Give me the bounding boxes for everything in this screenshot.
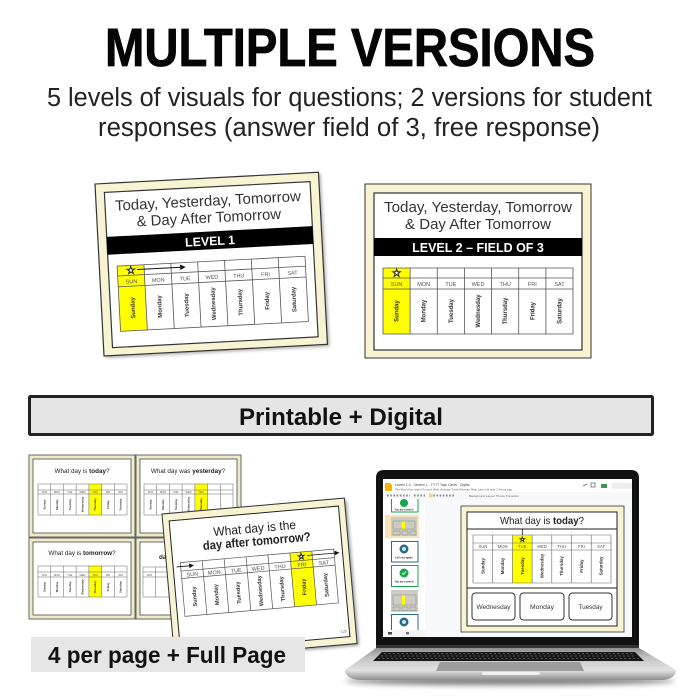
calendar: Monday <box>422 299 428 322</box>
calendar: THU <box>274 564 286 571</box>
calendar: FRI <box>528 282 537 288</box>
panel: full page card <box>162 498 359 661</box>
panel: level 1 card <box>95 172 330 358</box>
card: tomorrow: Sunday <box>42 582 46 592</box>
calendar: FRI <box>261 272 271 278</box>
calendar: Thursday <box>279 575 287 602</box>
calendar: Wednesday <box>540 553 544 578</box>
panel: four per page cards <box>29 455 241 619</box>
calendar: Saturday <box>291 286 299 312</box>
laptop base <box>345 648 676 680</box>
card: tomorrow: MON <box>54 573 60 577</box>
calendar: Wednesday <box>257 574 265 606</box>
calendar: Monday <box>157 294 164 318</box>
calendar: Wednesday <box>476 294 482 328</box>
card: today: Saturday <box>119 498 123 510</box>
title: MULTIPLE VERSIONS <box>105 18 595 78</box>
calendar <box>180 549 338 616</box>
calendar: Sunday <box>395 300 401 322</box>
calendar: Tuesday <box>184 292 191 317</box>
label: 4 per page + full page: 4 per page + Full Page <box>48 642 286 668</box>
calendar: Friday <box>579 559 584 573</box>
card heading <box>384 199 572 233</box>
calendar: SAT <box>554 282 565 288</box>
card: today: Friday <box>106 500 110 509</box>
answer choices <box>472 593 612 620</box>
calendar: Friday <box>530 301 536 320</box>
calendar: THU <box>233 273 245 280</box>
calendar: Tuesday <box>235 580 243 604</box>
banner: printable + digital: Printable + Digital <box>239 404 443 431</box>
calendar: TUE <box>518 544 527 549</box>
card: yesterday: Tuesday <box>174 498 178 510</box>
calendar: FRI <box>297 562 307 569</box>
menu: File Edit View Insert Format Slide Arrange Tools Website Help Last edit was 2 hours ago <box>395 488 512 492</box>
calendar <box>473 529 611 583</box>
slides window <box>383 479 632 637</box>
calendar: Tuesday <box>520 557 525 575</box>
document title: Levels 1-4 - Version 1 - TYTT Task Cards - Digital <box>395 483 470 487</box>
calendar: SUN <box>478 544 487 549</box>
calendar: Monday <box>500 557 505 574</box>
card: yesterday: What day was yesterday? <box>151 468 226 475</box>
subtitle: responses (answer field of 3, free response) <box>98 114 600 142</box>
sidebar thumbnails: Let's try again! <box>395 556 413 560</box>
card: today: THU <box>93 490 98 494</box>
card: today: SUN <box>42 490 47 494</box>
card: yesterday: Sunday <box>148 499 152 510</box>
answer choices: Wednesday <box>476 604 511 611</box>
panel: level 2 card <box>365 184 591 358</box>
answer choices: Tuesday <box>578 604 603 611</box>
card: tomorrow: Wednesday <box>80 579 84 595</box>
answer choices: Monday <box>530 604 555 611</box>
card: today <box>29 455 135 537</box>
calendar: SAT <box>287 270 298 277</box>
level label: LEVEL 1 <box>185 233 235 250</box>
card: today: Thursday <box>93 498 97 511</box>
card: yesterday: MON <box>160 490 166 494</box>
card: yesterday <box>136 455 241 537</box>
calendar: Saturday <box>599 556 604 575</box>
calendar: Friday <box>301 577 309 595</box>
calendar: Thursday <box>237 288 245 316</box>
card: tomorrow: What day is tomorrow? <box>48 550 116 557</box>
calendar: WED <box>472 282 484 288</box>
slide canvas <box>425 499 632 637</box>
calendar: Thursday <box>559 556 564 576</box>
arrow <box>137 265 185 272</box>
sidebar thumbnails: You are correct! <box>394 508 414 512</box>
card: today: SAT <box>118 490 124 494</box>
calendar: Saturday <box>558 298 564 324</box>
calendar: MON <box>417 282 430 288</box>
card: yesterday: Monday <box>161 499 165 510</box>
toolbar: Background Layout Theme Transition <box>469 494 519 498</box>
calendar: Thursday <box>503 297 509 325</box>
arrows <box>177 551 339 569</box>
card: tomorrow: THU <box>93 573 98 577</box>
laptop screen bezel <box>376 470 639 648</box>
app icon <box>385 483 392 491</box>
calendar: MON <box>498 544 507 549</box>
level label: LEVEL 2 – FIELD OF 3 <box>412 241 544 255</box>
calendar: FRI <box>578 544 585 549</box>
calendar: WED <box>252 566 265 573</box>
top right controls <box>583 483 632 489</box>
banner: printable + digital <box>30 396 652 434</box>
card: today: TUE <box>67 490 73 494</box>
card: tomorrow: SAT <box>118 573 124 577</box>
calendar: Saturday <box>323 572 331 597</box>
calendar: TUE <box>445 282 457 288</box>
calendar: Sunday <box>480 558 485 574</box>
calendar: THU <box>500 282 511 288</box>
calendar: MON <box>152 277 165 284</box>
calendar: SAT <box>319 560 330 567</box>
calendar: MON <box>208 570 221 577</box>
card: tomorrow: WED <box>79 573 86 577</box>
card: tomorrow <box>29 538 135 619</box>
calendar: WED <box>205 275 219 281</box>
subtitle: 5 levels of visuals for questions; 2 versions for student <box>47 84 652 112</box>
calendar: Monday <box>213 583 221 605</box>
calendar: Friday <box>264 291 271 310</box>
slide question: What day is today? <box>500 515 584 527</box>
question text <box>201 517 311 553</box>
calendar: SUN <box>391 282 402 288</box>
subtitle <box>47 84 652 142</box>
card: day after tomorrow, small: SUN <box>147 573 152 577</box>
label: 4 per page + full page <box>31 637 305 672</box>
card: yesterday: Wednesday <box>186 496 190 512</box>
question text: day after tomorrow? <box>202 530 311 553</box>
card: today: Tuesday <box>68 498 72 510</box>
calendar: WED <box>537 544 547 549</box>
card: tomorrow: Saturday <box>119 581 123 593</box>
card: tomorrow: Thursday <box>93 580 97 593</box>
slide <box>461 506 624 632</box>
calendar: Tuesday <box>449 298 455 323</box>
card: tomorrow: FRI <box>106 573 110 577</box>
card: today: Monday <box>55 499 59 510</box>
sidebar thumbnails <box>383 499 425 637</box>
calendar: Sunday <box>130 296 137 319</box>
calendar: Wednesday <box>210 286 218 320</box>
card: today: FRI <box>106 490 110 494</box>
card: tomorrow: Tuesday <box>68 581 72 593</box>
page number: 125 <box>341 629 347 634</box>
card: today: Wednesday <box>80 496 84 512</box>
card: yesterday: TUE <box>173 490 179 494</box>
card: today: What day is today? <box>55 468 110 475</box>
card: day after tomorrow, small <box>136 538 241 619</box>
card: today: Sunday <box>42 499 46 510</box>
card: tomorrow: SUN <box>42 573 47 577</box>
calendar: TUE <box>231 568 242 575</box>
card heading: & Day After Tomorrow <box>136 207 282 230</box>
card heading: & Day After Tomorrow <box>405 216 551 233</box>
card: tomorrow: TUE <box>67 573 73 577</box>
calendar <box>117 256 308 331</box>
calendar: TUE <box>180 276 191 283</box>
card: tomorrow: Monday <box>55 581 59 592</box>
sidebar thumbnails: You are correct! <box>394 580 414 584</box>
calendar: SUN <box>126 279 137 286</box>
calendar: Sunday <box>191 585 199 607</box>
question text: What day is the <box>213 518 297 539</box>
calendar: THU <box>557 544 566 549</box>
card: yesterday: WED <box>185 490 192 494</box>
card: today: WED <box>79 490 86 494</box>
card: yesterday: THU <box>199 490 204 494</box>
calendar: SAT <box>597 544 605 549</box>
card: tomorrow: Friday <box>106 582 110 591</box>
calendar: SUN <box>186 572 199 579</box>
card: today: MON <box>54 490 60 494</box>
card heading <box>115 189 302 231</box>
card heading: Today, Yesterday, Tomorrow <box>115 189 302 215</box>
calendar <box>383 268 573 334</box>
laptop <box>345 470 676 685</box>
card: yesterday: SUN <box>148 490 153 494</box>
toolbar <box>383 492 632 499</box>
card: yesterday: Thursday <box>199 498 203 511</box>
card: day after tomorrow, small: day after tomorrow? <box>159 554 220 561</box>
card heading: Today, Yesterday, Tomorrow <box>384 199 572 216</box>
